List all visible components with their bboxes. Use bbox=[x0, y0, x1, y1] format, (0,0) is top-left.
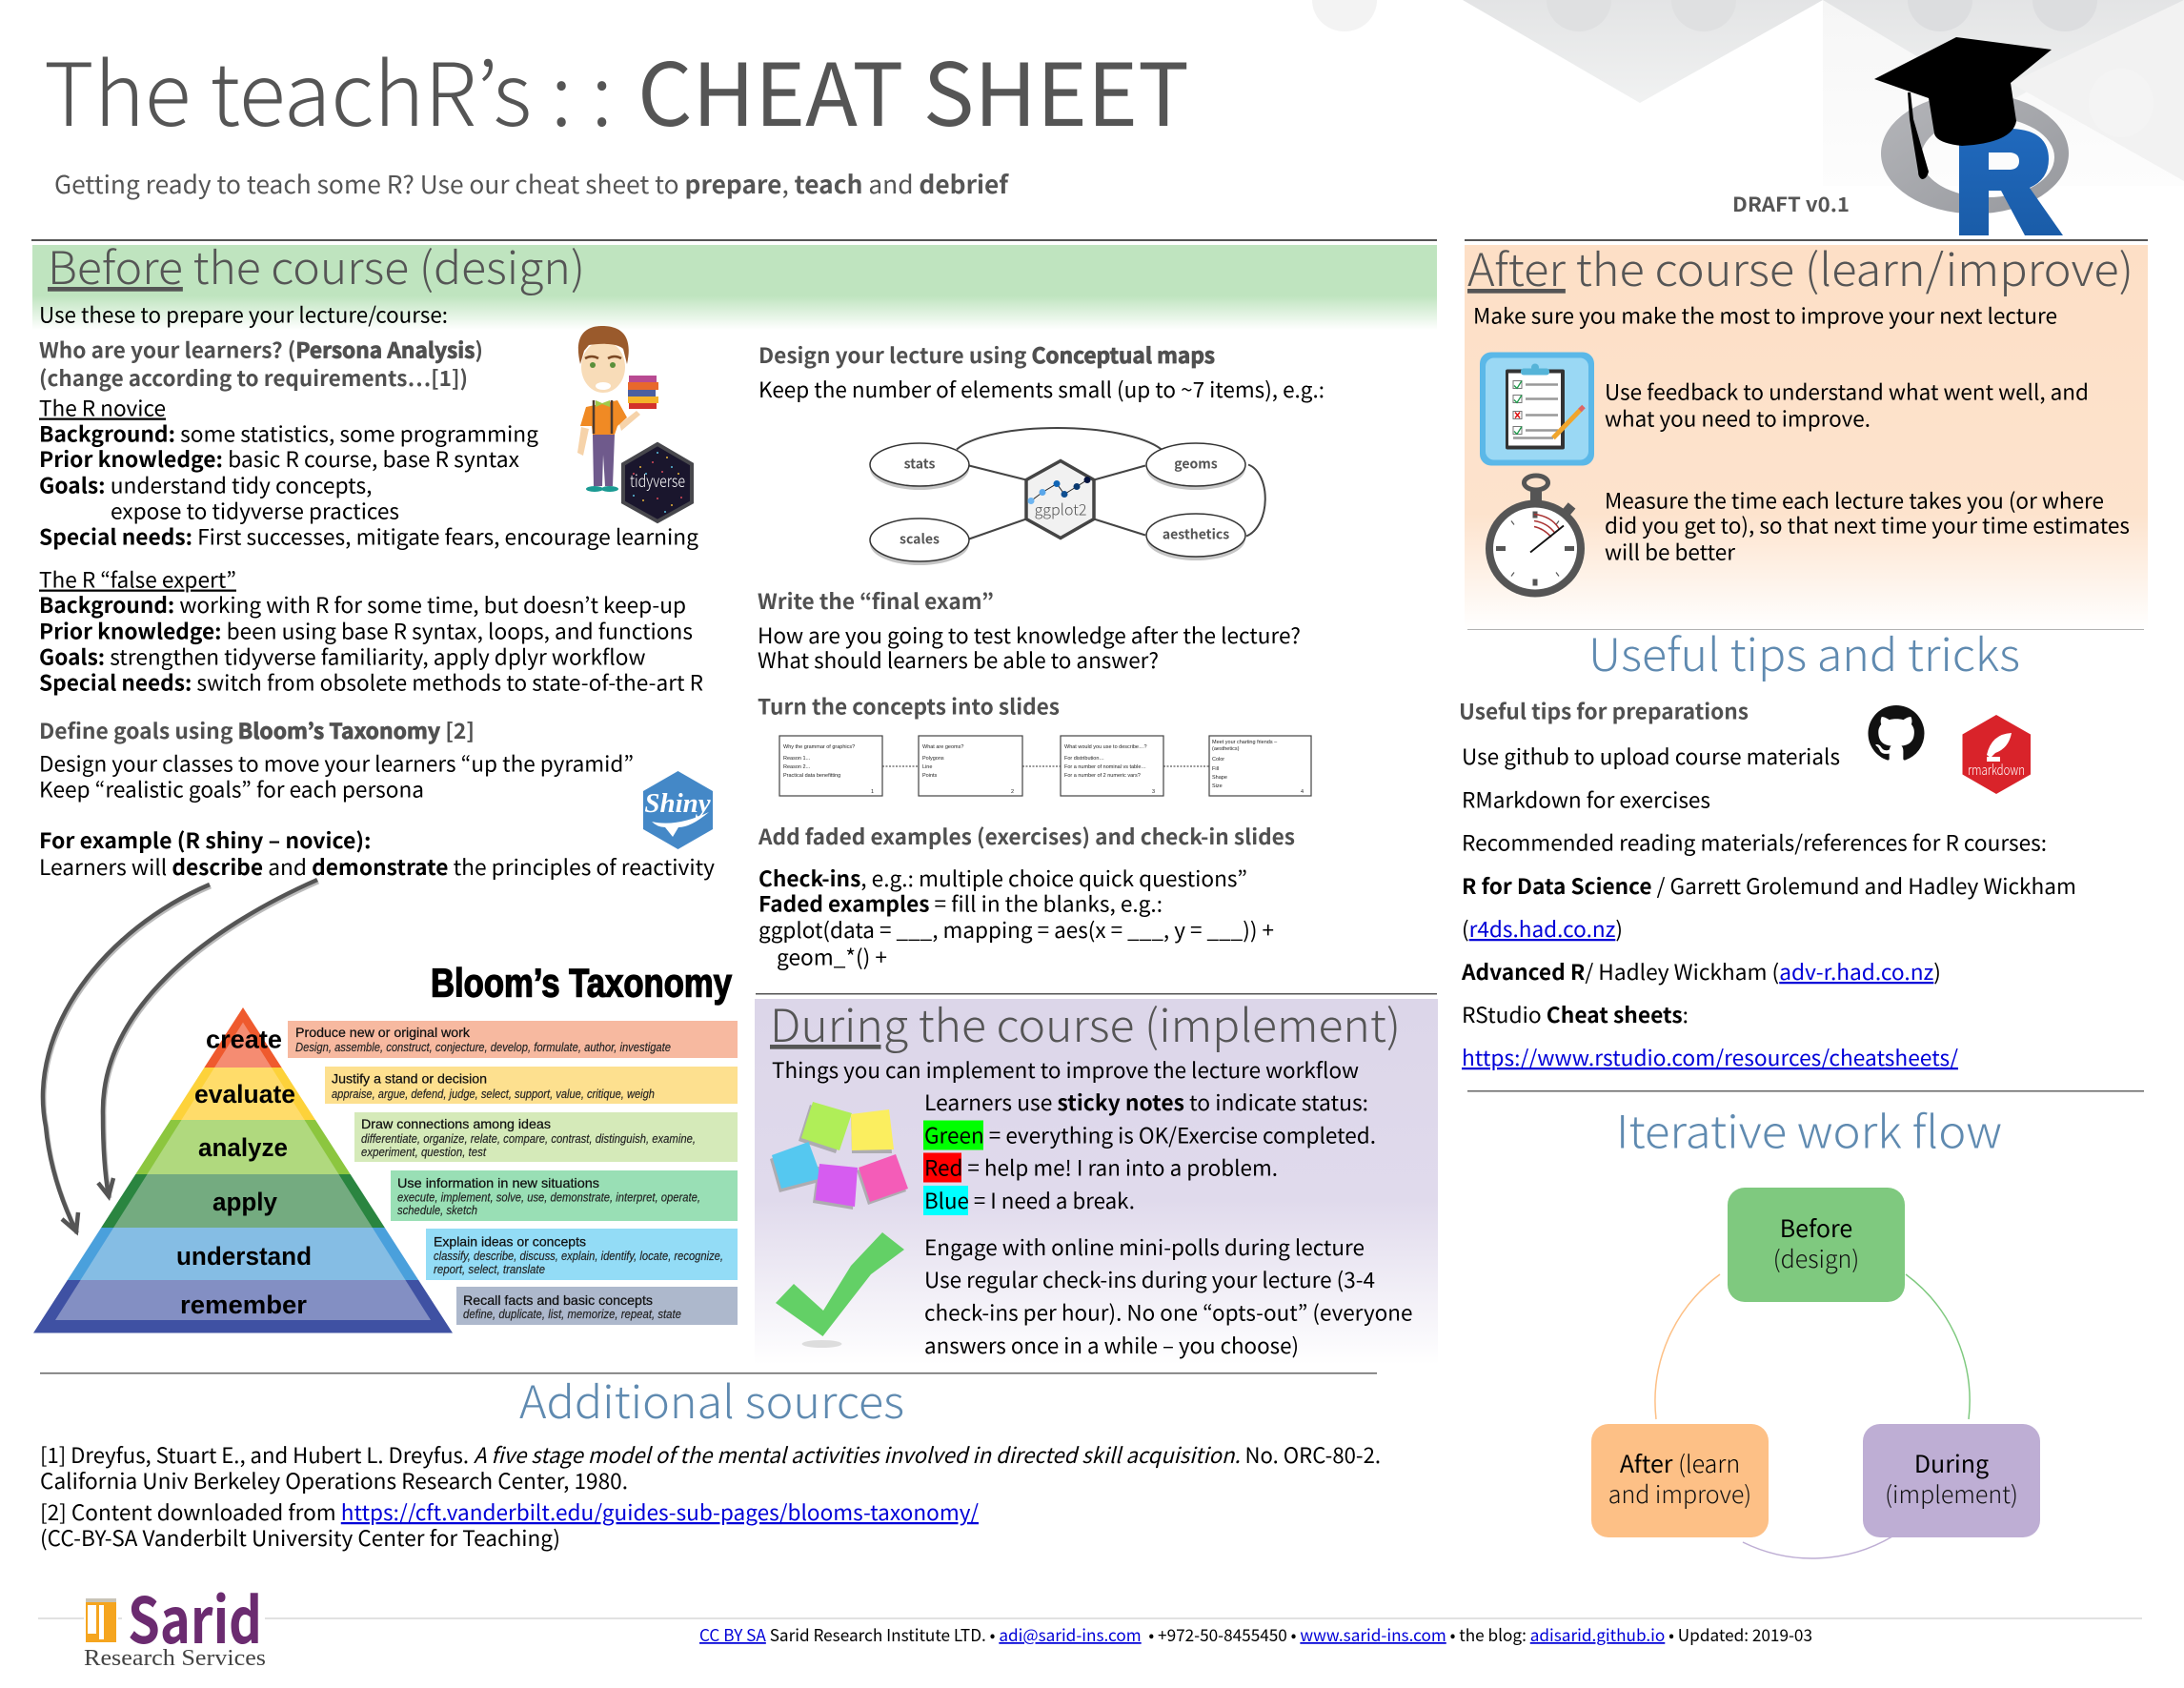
slide 4: Fill bbox=[1212, 766, 1219, 772]
slide 2: 2 bbox=[1011, 789, 1014, 795]
text block: check-ins: Engage with online mini-polls during lecture bbox=[924, 1231, 1365, 1262]
icon: check mark bbox=[776, 1232, 904, 1348]
node: aesthetics: aesthetics bbox=[1163, 524, 1229, 543]
text block: pyramid goals: For example (R shiny – novice): bbox=[39, 824, 372, 855]
taxonomy level: create: Produce new or original work bbox=[295, 1025, 471, 1040]
text block: faded examples: ggplot(data = ___, mapping = aes(x = ___, y = ___)) + bbox=[758, 914, 1274, 945]
text block: faded examples: geom_*() + bbox=[777, 942, 887, 972]
text block: tips: https://www.rstudio.com/resources/cheatsheets/ bbox=[1462, 1042, 1958, 1072]
slide 4: Meet your charting friends – bbox=[1212, 740, 1278, 745]
sticky notes legend: Blue = I need a break. bbox=[924, 1185, 1135, 1215]
icon: ggplot2 hex: ggplot2 bbox=[1035, 498, 1086, 520]
node: aesthetics bbox=[1146, 514, 1245, 557]
node: scales: scales bbox=[900, 530, 940, 549]
heading: useful tips and tricks: Useful tips and tricks bbox=[1588, 619, 2020, 684]
text block: final exam: Write the “final exam” bbox=[758, 585, 994, 616]
intro text: Use these to prepare your lecture/course: bbox=[39, 299, 448, 330]
text block: time estimates: will be better bbox=[1605, 536, 1735, 566]
slide 1: Practical data benefitting bbox=[783, 773, 840, 779]
concept map diagram bbox=[870, 428, 1265, 565]
text block: final exam bbox=[758, 585, 1301, 675]
text block: conceptual maps: Design your lecture using Conceptual maps bbox=[758, 339, 1215, 370]
slide 4: Size bbox=[1212, 783, 1223, 789]
taxonomy level: analyze bbox=[354, 1112, 738, 1162]
logo: Sarid Research Services: Sarid bbox=[128, 1571, 262, 1662]
taxonomy level: remember: Recall facts and basic concepts bbox=[463, 1292, 653, 1308]
background pattern bbox=[1312, 0, 2184, 186]
icon: sticky notes bbox=[770, 1102, 908, 1210]
taxonomy level: analyze: differentiate, organize, relate, compare, contrast, distinguish, examine, bbox=[361, 1132, 696, 1146]
taxonomy level: analyze: experiment, question, test bbox=[361, 1146, 486, 1159]
icon: stopwatch bbox=[1486, 476, 1585, 597]
text block: references: [2] Content downloaded from https://cft.vanderbilt.edu/guides-sub-pages/blooms-taxonomy/ bbox=[40, 1496, 979, 1527]
icon: ggplot2 hex bbox=[1026, 461, 1094, 538]
taxonomy level: evaluate: appraise, argue, defend, judge, select, support, value, critique, weigh bbox=[332, 1088, 655, 1101]
chart: Bloom's taxonomy pyramid bbox=[33, 961, 738, 1332]
icon: shiny hex: Shiny bbox=[644, 788, 711, 819]
chart: Bloom's taxonomy pyramid: evaluate bbox=[194, 1080, 295, 1108]
node: during bbox=[1863, 1424, 2040, 1537]
taxonomy level: remember bbox=[456, 1287, 738, 1325]
text block: tips: RStudio Cheat sheets: bbox=[1462, 999, 1689, 1029]
slide 2: What are geoms? bbox=[922, 744, 963, 750]
slide 2: Points bbox=[922, 773, 938, 779]
sticky notes legend: Red = help me! I ran into a problem. bbox=[924, 1151, 1278, 1182]
text block: check-ins bbox=[924, 1231, 1412, 1360]
panel: during the course bbox=[755, 989, 1438, 1365]
text block: persona analysis: The R “false expert” bbox=[39, 564, 236, 595]
icon: teacher character bbox=[577, 326, 658, 492]
icon: shiny hex bbox=[643, 771, 713, 849]
text block: tips: Use github to upload course materials bbox=[1462, 741, 1840, 771]
slide 2: Polygons bbox=[922, 756, 944, 762]
sticky notes legend bbox=[923, 1087, 1376, 1215]
icon: tidyverse hex: tidyverse bbox=[630, 469, 685, 493]
arrow: to remember bbox=[43, 885, 211, 1233]
icon: rmarkdown hex bbox=[1963, 715, 2031, 794]
text block: feedback: what you need to improve. bbox=[1605, 402, 1871, 433]
chart: Bloom's taxonomy pyramid: understand bbox=[176, 1242, 312, 1271]
text block: references bbox=[40, 1439, 1381, 1553]
subtitle: Getting ready to teach some R? Use our cheat sheet to prepare, teach and debrief bbox=[54, 166, 1009, 201]
chart: Bloom's taxonomy pyramid: analyze bbox=[198, 1133, 288, 1162]
text block: faded examples: Faded examples = fill in the blanks, e.g.: bbox=[758, 888, 1163, 919]
text block: faded examples bbox=[758, 821, 1295, 972]
panel: before the course bbox=[32, 232, 1437, 330]
text block: persona analysis: Background: working with R for some time, but doesn’t keep-up bbox=[39, 589, 686, 620]
text block: persona analysis bbox=[39, 334, 703, 698]
title: The teachR’s : : bbox=[44, 26, 613, 152]
text block: faded examples: Add faded examples (exercises) and check-in slides bbox=[758, 821, 1295, 851]
text block: faded examples: Check-ins, e.g.: multiple choice quick questions” bbox=[758, 863, 1247, 893]
slide 4: (aesthetics) bbox=[1212, 746, 1240, 752]
text block: references: [1] Dreyfus, Stuart E., and Hubert L. Dreyfus. A five stage model of the mental activities involved in directed skill acquisition. No. ORC-80-2. bbox=[40, 1439, 1381, 1470]
workflow cycle diagram bbox=[1591, 1188, 2040, 1558]
arrow: to understand bbox=[98, 880, 318, 1198]
text block: references: (CC-BY-SA Vanderbilt University Center for Teaching) bbox=[40, 1522, 560, 1553]
node: geoms: geoms bbox=[1174, 454, 1218, 473]
slide 4 bbox=[1209, 736, 1311, 796]
node: stats bbox=[870, 443, 969, 486]
chart: Bloom's taxonomy pyramid: remember bbox=[180, 1291, 307, 1319]
taxonomy level: evaluate: Justify a stand or decision bbox=[332, 1071, 487, 1087]
icon: rmarkdown hex: rmarkdown bbox=[1968, 760, 2025, 780]
title bbox=[44, 26, 1189, 152]
heading: before the course: Before the course (design) bbox=[48, 232, 585, 297]
slide 3: For distribution… bbox=[1064, 756, 1104, 762]
chart: Bloom's taxonomy pyramid: apply bbox=[212, 1188, 277, 1216]
intro text: Make sure you make the most to improve your next lecture bbox=[1473, 299, 2057, 330]
text block: persona analysis: Who are your learners? (Persona Analysis) bbox=[39, 334, 483, 364]
sticky notes legend: Green = everything is OK/Exercise completed. bbox=[924, 1119, 1376, 1149]
text block: persona analysis: Special needs: First successes, mitigate fears, encourage learning bbox=[39, 520, 698, 551]
node: after bbox=[1591, 1424, 1769, 1537]
taxonomy level: create: Design, assemble, construct, conjecture, develop, formulate, author, investigate bbox=[295, 1041, 671, 1054]
logo: Sarid Research Services bbox=[84, 1571, 266, 1671]
icon: tidyverse hex bbox=[623, 444, 692, 521]
icon: feedback clipboard bbox=[1480, 353, 1594, 465]
slide 2: Line bbox=[922, 764, 932, 770]
slide 1: 1 bbox=[871, 789, 874, 795]
text block: persona analysis: expose to tidyverse practices bbox=[111, 496, 399, 526]
slide 1: Why the grammar of graphics? bbox=[783, 744, 855, 750]
node: stats: stats bbox=[904, 454, 935, 473]
heading: iterative work flow: Iterative work flow bbox=[1616, 1096, 2002, 1161]
taxonomy level: evaluate bbox=[325, 1067, 738, 1104]
node: scales bbox=[870, 519, 969, 561]
text block: tips: R for Data Science / Garrett Grolemund and Hadley Wickham bbox=[1462, 870, 2076, 901]
text block: persona analysis: The R novice bbox=[39, 393, 166, 423]
node: before bbox=[1728, 1188, 1905, 1302]
slide 3: What would you use to describe…? bbox=[1064, 744, 1147, 750]
sticky notes legend: Learners use sticky notes to indicate status: bbox=[924, 1087, 1368, 1117]
text block: tips: Advanced R/ Hadley Wickham (adv-r.had.co.nz) bbox=[1461, 956, 1941, 986]
text block: tips: Recommended reading materials/references for R courses: bbox=[1462, 827, 2047, 858]
icon: R logo with graduation cap bbox=[1874, 37, 2069, 235]
slide 1: Reason 1... bbox=[783, 756, 811, 762]
text block: tips: Useful tips for preparations bbox=[1459, 696, 1749, 726]
heading: turn concepts into slides: Turn the concepts into slides bbox=[758, 690, 1060, 721]
taxonomy level: understand: Explain ideas or concepts bbox=[434, 1233, 586, 1249]
taxonomy level: remember: define, duplicate, list, memorize, repeat, state bbox=[463, 1308, 681, 1321]
taxonomy level: apply: schedule, sketch bbox=[397, 1204, 477, 1217]
slide storyboard bbox=[779, 736, 1311, 796]
node: after: After (learn bbox=[1620, 1446, 1740, 1480]
node: before: (design) bbox=[1773, 1241, 1859, 1275]
text block: feedback: Use feedback to understand what went well, and bbox=[1605, 376, 2089, 406]
slide 4: Shape bbox=[1212, 775, 1227, 781]
slide 1 bbox=[779, 736, 882, 796]
footer contact line: CC BY SA Sarid Research Institute LTD. • adi@sarid-ins.com • +972-50-8455450 • www.sarid-ins.com • the blog: adisarid.github.io • Updated: 2019-03 bbox=[699, 1623, 1812, 1647]
text block: pyramid goals: Design your classes to move your learners “up the pyramid” bbox=[39, 747, 634, 778]
footer line bbox=[38, 1617, 2142, 1619]
icon: github bbox=[1868, 705, 1924, 761]
text block: pyramid goals: Keep “realistic goals” for each persona bbox=[39, 774, 424, 804]
text block: final exam: How are you going to test knowledge after the lecture? bbox=[758, 620, 1301, 650]
text block: persona analysis: Background: some statistics, some programming bbox=[39, 417, 538, 448]
divider lines bbox=[31, 239, 2148, 1374]
taxonomy level: analyze: Draw connections among ideas bbox=[361, 1116, 551, 1131]
text block: conceptual maps: Keep the number of elements small (up to ~7 items), e.g.: bbox=[758, 374, 1325, 404]
logo: Sarid Research Services: Research Services bbox=[84, 1646, 266, 1671]
text block: persona analysis: (change according to requirements…[1]) bbox=[39, 362, 468, 393]
intro text: Things you can implement to improve the lecture workflow bbox=[772, 1054, 1359, 1085]
text block: pyramid goals: Learners will describe and demonstrate the principles of reactivity bbox=[39, 851, 715, 882]
taxonomy level: apply bbox=[391, 1170, 738, 1221]
taxonomy level: understand: report, select, translate bbox=[434, 1263, 545, 1276]
text block: tips: (r4ds.had.co.nz) bbox=[1462, 913, 1623, 944]
text block: persona analysis: Goals: strengthen tidyverse familiarity, apply dplyr workflow bbox=[39, 641, 646, 671]
text block: tips: RMarkdown for exercises bbox=[1462, 783, 1710, 814]
text block: final exam: What should learners be able to answer? bbox=[758, 644, 1159, 675]
slide 3: For a number of nominal vs table… bbox=[1064, 764, 1146, 770]
chart: Bloom's taxonomy pyramid: create bbox=[206, 1026, 282, 1054]
heading: define goals: Define goals using Bloom’s Taxonomy [2] bbox=[39, 715, 475, 745]
chart title: Bloom’s Taxonomy bbox=[431, 961, 733, 1005]
heading: additional sources: Additional sources bbox=[519, 1366, 904, 1432]
slide 4: Color bbox=[1212, 757, 1224, 763]
text block: time estimates: Measure the time each lecture takes you (or where bbox=[1605, 484, 2104, 515]
text block: check-ins: answers once in a while – you choose) bbox=[924, 1330, 1299, 1360]
text block: persona analysis: Prior knowledge: basic R course, base R syntax bbox=[39, 443, 519, 474]
slide 3 bbox=[1061, 736, 1163, 796]
slide 2 bbox=[919, 736, 1022, 796]
taxonomy level: understand: classify, describe, discuss, explain, identify, locate, recognize, bbox=[434, 1250, 723, 1263]
text block: conceptual maps bbox=[758, 339, 1325, 404]
node: geoms bbox=[1146, 443, 1245, 486]
text block: pyramid goals bbox=[39, 747, 715, 882]
text block: feedback bbox=[1605, 376, 2089, 433]
node: before: Before bbox=[1780, 1210, 1852, 1245]
slide 3: 3 bbox=[1152, 789, 1155, 795]
node: during: (implement) bbox=[1885, 1476, 2018, 1511]
node: after: and improve) bbox=[1608, 1476, 1751, 1511]
title: CHEAT SHEET bbox=[637, 26, 1189, 152]
text block: check-ins: Use regular check-ins during your lecture (3-4 bbox=[924, 1264, 1375, 1294]
text block: references: California Univ Berkeley Operations Research Center, 1980. bbox=[40, 1465, 628, 1495]
slide 3: For a number of 2 numeric vars? bbox=[1064, 773, 1141, 779]
taxonomy level: create bbox=[288, 1021, 738, 1058]
panel: after the course bbox=[1465, 234, 2148, 629]
text block: tips bbox=[1459, 696, 2076, 1072]
text block: persona analysis: Special needs: switch from obsolete methods to state-of-the-art R bbox=[39, 667, 703, 698]
node: during: During bbox=[1914, 1446, 1989, 1480]
draft version label: DRAFT v0.1 bbox=[1732, 190, 1850, 218]
taxonomy level: apply: Use information in new situations bbox=[397, 1175, 599, 1190]
heading: after the course: After the course (learn/improve) bbox=[1467, 234, 2133, 299]
text block: persona analysis: Goals: understand tidy concepts, bbox=[39, 469, 372, 499]
slide 1: Reason 2... bbox=[783, 764, 811, 770]
heading: during the course: During the course (implement) bbox=[770, 989, 1401, 1055]
text block: time estimates: did you get to), so that next time your time estimates bbox=[1605, 509, 2130, 539]
taxonomy level: understand bbox=[426, 1229, 738, 1280]
text block: persona analysis: Prior knowledge: been using base R syntax, loops, and functions bbox=[39, 616, 693, 646]
text block: time estimates bbox=[1605, 484, 2130, 566]
slide 4: 4 bbox=[1301, 789, 1304, 795]
taxonomy level: apply: execute, implement, solve, use, demonstrate, interpret, operate, bbox=[397, 1191, 700, 1205]
text block: check-ins: check-ins per hour). No one “opts-out” (everyone bbox=[924, 1296, 1412, 1327]
